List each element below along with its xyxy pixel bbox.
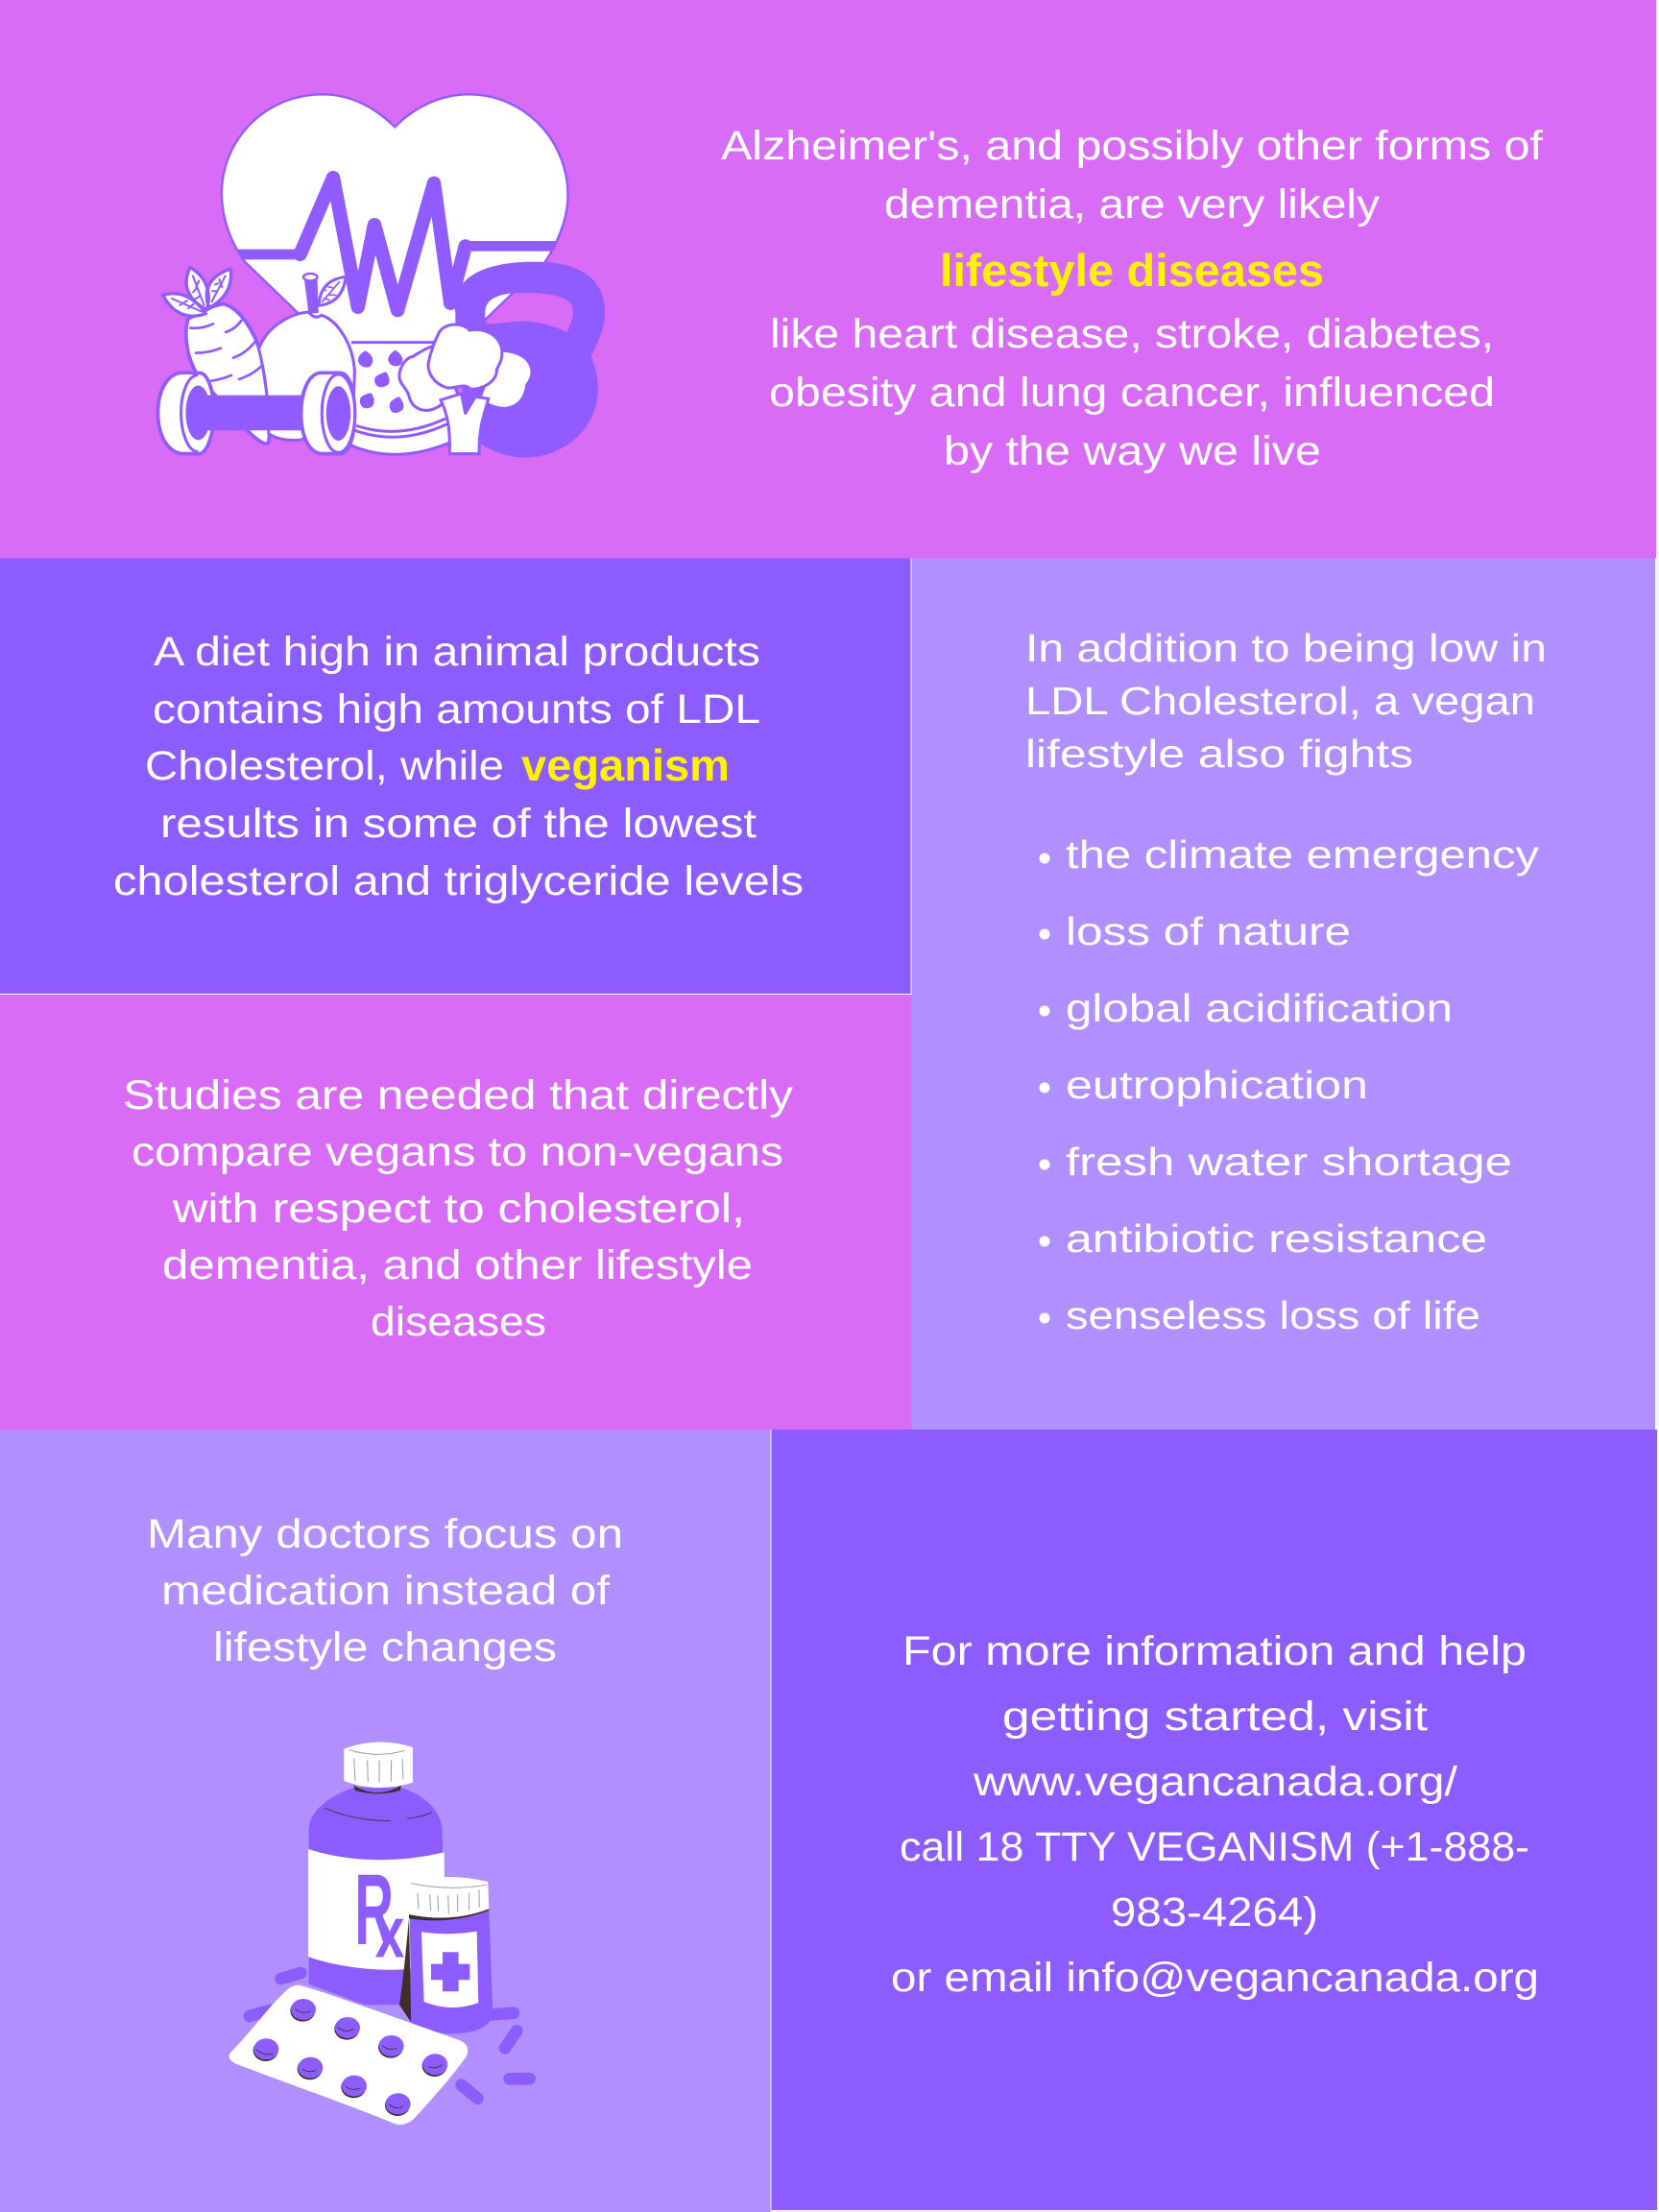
text: contact details: getting started, visit: [1002, 1694, 1428, 1740]
text: Rx: R: [354, 1854, 394, 1966]
text: studies statement: compare vegans to non-vegans: [132, 1129, 783, 1175]
text: contact details: or email info@vegancanada.org: [891, 1955, 1539, 2001]
icon: watermelon: [349, 343, 452, 454]
icon: medicine bottles and pills: [229, 1743, 530, 2125]
text: cholesterol statement: [113, 629, 804, 904]
text: studies statement: [123, 1072, 794, 1345]
icon: heart, healthy food and weights: [157, 94, 605, 458]
panel: animal products and cholesterol: [0, 559, 910, 994]
text: list intro: [1025, 626, 1547, 776]
text: alzheimer's statement: [721, 123, 1544, 474]
text: contact details: [891, 1628, 1539, 2001]
text: doctors statement: lifestyle changes: [213, 1624, 557, 1671]
list: issues: antibiotic resistance: [1066, 1216, 1487, 1261]
text: cholesterol statement: A diet high in animal products: [154, 629, 760, 675]
text: doctors statement: medication instead of: [161, 1568, 611, 1614]
text: alzheimer's statement: obesity and lung cancer, influenced: [769, 370, 1495, 416]
text: studies statement: Studies are needed that directly: [123, 1072, 794, 1118]
panel: what a vegan lifestyle fights: [912, 559, 1655, 1430]
list: issues: [1039, 832, 1540, 1337]
text: cholesterol statement: contains high amounts of LDL: [153, 686, 760, 733]
icon: blister pack of pills: [229, 1985, 468, 2125]
icon: apple: [258, 274, 354, 441]
icon: motion dashes: [250, 1973, 530, 2099]
list: issues: loss of nature: [1066, 909, 1351, 953]
icon: large prescription bottle: [308, 1743, 445, 2005]
text: studies statement: dementia, and other lifestyle: [162, 1242, 753, 1288]
list: issues: senseless loss of life: [1066, 1293, 1480, 1337]
text: list intro: LDL Cholesterol, a vegan: [1025, 679, 1535, 723]
text: contact details: www.vegancanada.org/: [973, 1759, 1457, 1805]
text: studies statement: with respect to cholesterol,: [172, 1186, 745, 1232]
text: doctors statement: [147, 1511, 623, 1671]
list: issues: global acidification: [1066, 986, 1453, 1030]
panel: studies needed: [0, 995, 912, 1430]
text: contact details: call 18 TTY VEGANISM (+1-888-: [900, 1824, 1529, 1870]
text: studies statement: diseases: [371, 1299, 546, 1345]
panel: doctors and medication: [0, 1430, 770, 2212]
text: list intro: In addition to being low in: [1025, 626, 1547, 670]
text: cholesterol statement: Cholesterol, while: [145, 743, 504, 789]
text: alzheimer's statement: dementia, are very likely: [884, 181, 1381, 228]
panel: lifestyle diseases intro: [0, 0, 1656, 559]
icon: dumbbell: [157, 373, 355, 454]
text: alzheimer's statement: Alzheimer's, and possibly other forms of: [721, 123, 1544, 169]
highlight: veganism: veganism: [521, 740, 730, 790]
text: contact details: For more information and help: [902, 1628, 1527, 1674]
icon: carrot: [163, 267, 270, 444]
highlight: lifestyle diseases: lifestyle diseases: [940, 245, 1324, 296]
icon: kettlebell: [455, 262, 605, 458]
text: doctors statement: Many doctors focus on: [147, 1511, 623, 1557]
list: issues: eutrophication: [1066, 1063, 1368, 1107]
text: alzheimer's statement: like heart disease, stroke, diabetes,: [770, 311, 1494, 357]
icon: broccoli: [399, 325, 531, 454]
text: cholesterol statement: cholesterol and triglyceride levels: [113, 858, 804, 904]
panel: contact information: [772, 1430, 1657, 2210]
icon: heart with heartbeat line: [221, 93, 569, 348]
text: cholesterol statement: results in some of the lowest: [160, 801, 757, 847]
list: issues: fresh water shortage: [1066, 1140, 1512, 1184]
text: contact details: 983-4264): [1111, 1889, 1318, 1936]
text: Rx: [354, 1854, 405, 1972]
text: list intro: lifestyle also fights: [1025, 732, 1413, 776]
icon: small bottle with cross: [399, 1877, 493, 2033]
text: Rx: x: [375, 1891, 405, 1972]
text: alzheimer's statement: by the way we live: [944, 428, 1321, 474]
list: issues: the climate emergency: [1066, 832, 1540, 877]
